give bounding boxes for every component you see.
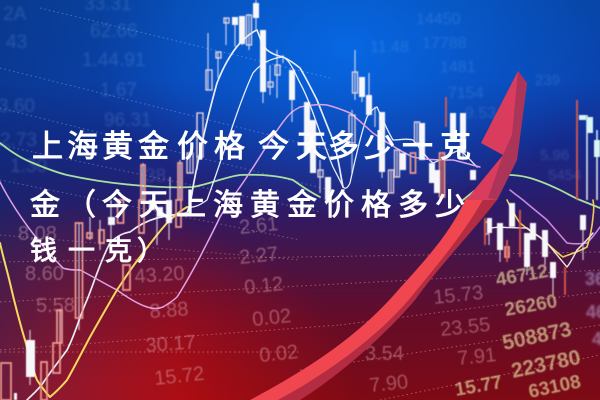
background numbers: blue zone: 38 xyxy=(145,166,166,187)
background numbers: red zone: 2.27 xyxy=(238,243,279,269)
arrow head xyxy=(466,71,527,200)
title line 2: 金（今天上海黄金价格多少 xyxy=(30,189,465,222)
background numbers: red zone: 7.90 xyxy=(368,371,409,397)
background numbers: blue zone: 43 xyxy=(6,32,27,53)
background numbers: red zone: 8.60 xyxy=(25,263,64,285)
background numbers: red zone: 15.73 xyxy=(432,282,484,309)
pale moving average right xyxy=(490,227,593,267)
title xyxy=(30,129,471,266)
background numbers: red zone: 43.20 xyxy=(134,263,185,288)
background numbers: blue zone: 2.73 xyxy=(0,130,37,151)
background numbers: red zone: 0.12 xyxy=(243,273,284,299)
hollow candles xyxy=(187,15,420,193)
background numbers: yellow volume column: 508873 xyxy=(500,318,574,355)
top-right candles xyxy=(587,115,597,200)
background numbers: blue zone: 96.31 xyxy=(104,110,152,131)
background numbers: blue zone: 62.66 xyxy=(90,21,138,42)
background numbers: blue zone: 1.44.91 xyxy=(82,50,145,71)
background numbers: blue zone: 5454 xyxy=(548,167,581,184)
yellow moving average xyxy=(0,207,187,397)
background numbers: blue zone: 14450 xyxy=(416,11,461,28)
background numbers: red zone: 30.17 xyxy=(145,332,196,357)
white moving average A xyxy=(27,30,343,400)
red wicks right and centre xyxy=(442,97,577,295)
background numbers: red zone: 23.55 xyxy=(439,314,491,341)
background numbers: blue zone: 2A xyxy=(3,4,27,25)
background numbers: blue zone: 239 xyxy=(535,72,560,89)
background numbers: blue zone: 9.53 xyxy=(465,105,496,122)
background numbers: red zone xyxy=(18,213,497,397)
arrow band bright side xyxy=(250,198,484,400)
background numbers: blue zone: 1.30 xyxy=(10,156,47,177)
background numbers: yellow volume column xyxy=(453,261,583,400)
green moving average right xyxy=(463,175,600,208)
background numbers: yellow volume column: 26260 xyxy=(503,291,559,321)
background numbers: blue zone: 5.96 xyxy=(540,147,569,164)
background numbers: yellow volume column: 223780 xyxy=(509,346,583,383)
salmon red candles xyxy=(1,153,509,400)
red curved arrow xyxy=(250,71,527,400)
background numbers: red zone: 0.02 xyxy=(258,341,299,367)
violet moving average xyxy=(0,105,480,308)
background numbers: red zone: 8.88 xyxy=(149,298,189,323)
background numbers: red zone: 15.72 xyxy=(153,363,205,390)
background numbers: red zone: 7.91 xyxy=(456,344,497,370)
yellow moving average right xyxy=(507,200,594,257)
background numbers: red zone: 3.54 xyxy=(365,343,404,365)
background numbers: yellow volume column: 46712 xyxy=(494,261,550,291)
background numbers: blue zone xyxy=(0,0,581,187)
background numbers: blue zone: 17788 xyxy=(422,35,467,52)
background numbers: violet right edge xyxy=(585,269,600,349)
arrow band dark side xyxy=(278,198,497,400)
background numbers: red zone: 5.58 xyxy=(36,295,75,317)
violet moving average right xyxy=(510,190,600,244)
green moving average xyxy=(0,143,320,197)
background numbers: blue zone: 1.67 xyxy=(100,80,137,101)
background numbers: red zone: 8.08 xyxy=(18,223,57,245)
background numbers: blue zone: 7154 xyxy=(448,85,484,102)
background numbers: blue zone: 11.48 xyxy=(370,39,409,56)
white moving average B xyxy=(187,57,477,207)
background numbers: red zone: 0.02 xyxy=(251,305,292,331)
background numbers: blue zone: 1481 xyxy=(440,59,476,76)
title line 1: 上海黄金价格今天多少一克 xyxy=(32,129,471,164)
background numbers: red zone: 2.61 xyxy=(238,213,279,239)
title line 3: 钱一克） xyxy=(30,236,164,266)
